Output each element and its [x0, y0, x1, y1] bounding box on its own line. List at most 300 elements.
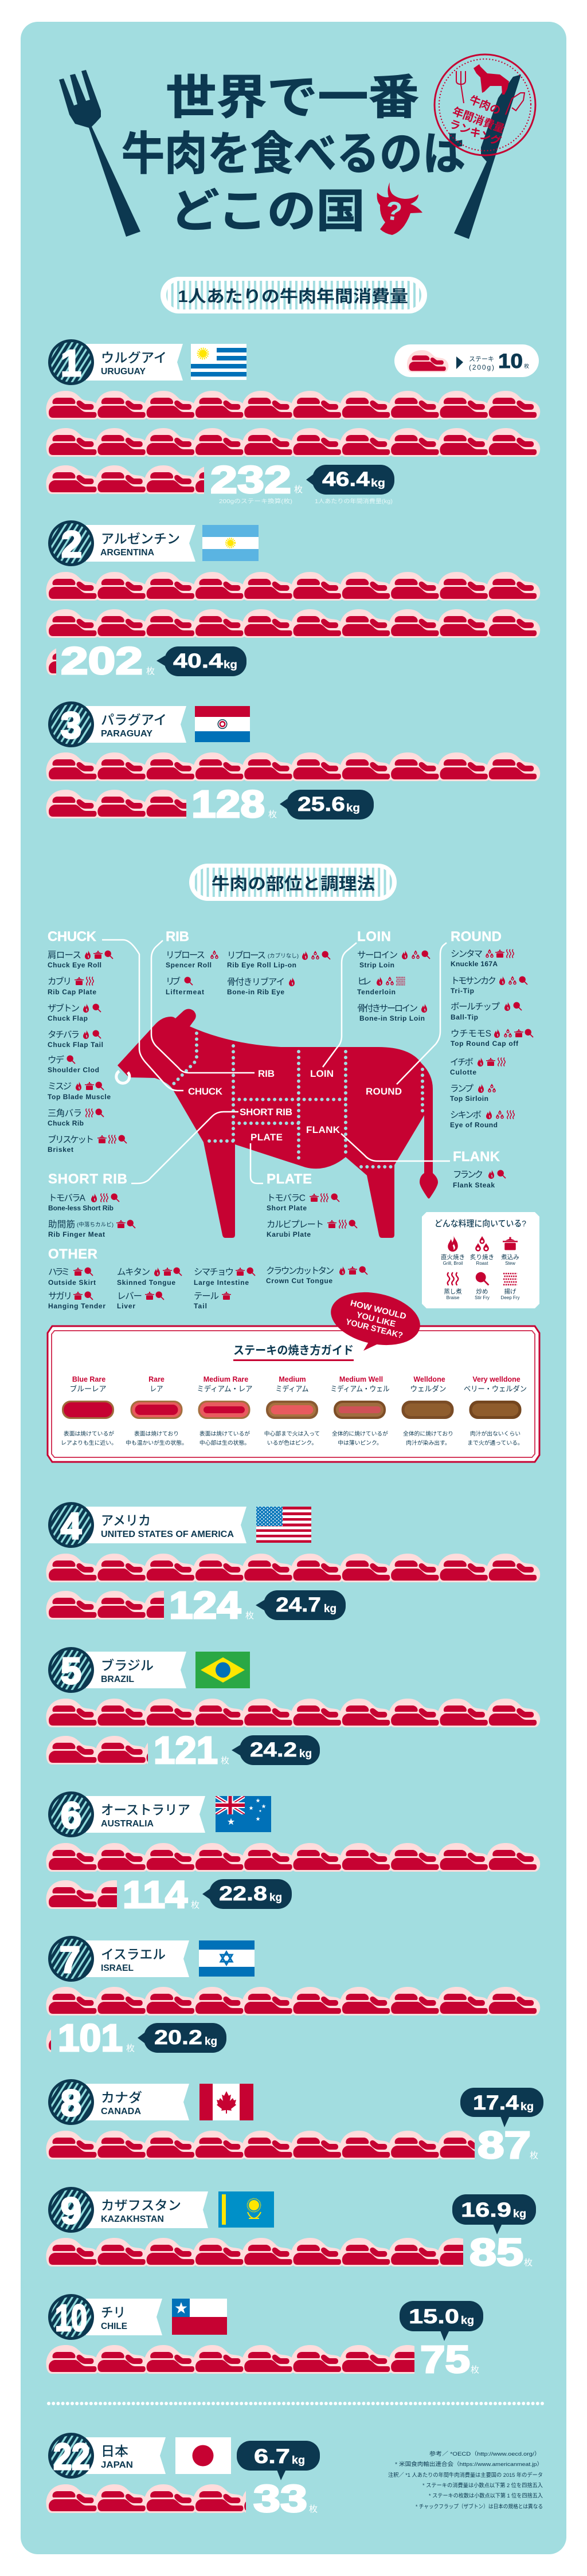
doneness: medium: Medium [279, 1375, 306, 1383]
item: ブリスケット [48, 1134, 127, 1154]
count: 128: 枚 [268, 810, 277, 820]
steak rows [46, 1554, 540, 1620]
rank badge: 4 [61, 1505, 81, 1547]
ribbon [86, 2299, 162, 2335]
item: トモバラA [48, 1193, 119, 1212]
item: シキンボ [450, 1109, 514, 1129]
item: トモサンカク: Tri-Tip [451, 987, 474, 995]
list: OTHER: OTHER [48, 1246, 97, 1262]
doneness: medium well: 中は薄いピンク。 [338, 1439, 382, 1446]
bubble: 16.9kg: kg [513, 2208, 526, 2220]
item: クラウンカットタン [266, 1265, 367, 1285]
section heading: 牛肉の部位と調理法: 牛肉の部位と調理法 [212, 875, 375, 893]
item: 助間筋(中落ちカルビ): 助間筋 [48, 1220, 75, 1230]
legend: steak 200g = 10 pieces: ステーキ [469, 356, 494, 363]
rank badge: 6 [61, 1794, 81, 1836]
doneness: well done: 肉汁が染み出す。 [406, 1439, 451, 1446]
bubble: 15.0kg [400, 2301, 483, 2341]
item: 骨付きサーロイン: Bone-in Strip Loin [359, 1014, 425, 1022]
ribbon [86, 2191, 208, 2228]
item: クラウンカットタン: クラウンカットタン [266, 1265, 334, 1276]
list: CHUCK [48, 929, 127, 1154]
item: ムキタン: ムキタン [117, 1267, 150, 1277]
count: 87: 87 [478, 2124, 531, 2167]
item: リブ: Liftermeat [166, 988, 204, 996]
item: リブロース(カブリなし): Rib Eye Roll Lip-on [227, 961, 296, 969]
item: ランプ [450, 1083, 496, 1103]
ribbon [86, 1796, 205, 1833]
rank badge [48, 339, 94, 385]
list: RIB [166, 929, 330, 996]
item: フランク: Flank Steak [453, 1181, 495, 1189]
item: テール: Tail [194, 1302, 207, 1310]
stamp: 牛肉の年間消費量ランキング: ランキング [448, 117, 503, 148]
doneness: medium rare: ミディアム・レア [197, 1385, 252, 1393]
legend: steak 200g = 10 pieces [394, 344, 539, 377]
bubble: 25.6kg [280, 790, 374, 820]
item: カルビプレート: Karubi Plate [267, 1230, 311, 1238]
item: クラウンカットタン: Crown Cut Tongue [266, 1277, 332, 1285]
count: 124: 枚 [245, 1611, 254, 1621]
count: 33: 枚 [309, 2504, 318, 2514]
count: 124: 124 [169, 1584, 241, 1627]
ribbon [86, 1507, 246, 1543]
icon: stew: 煮込み [501, 1254, 519, 1261]
count: 75: 75 [420, 2338, 470, 2381]
icon: stir fry: Stir Fry [475, 1295, 490, 1300]
bubble: 22.8kg: kg [269, 1892, 282, 1904]
item: トモバラC [267, 1193, 339, 1212]
rank 6: Australia [46, 1791, 540, 1916]
rank badge: 8 [61, 2082, 81, 2124]
count: 121: 枚 [221, 1756, 229, 1766]
item: ミスジ [48, 1081, 111, 1101]
list: SHORT RIB: SHORT RIB [48, 1171, 127, 1187]
references and notes: * チャックフラップ（ザブトン）は日本の規格とは異なる [416, 2503, 543, 2510]
item: 肩ロース: 肩ロース [48, 950, 81, 960]
ribbon: ISRAEL [101, 1963, 134, 1973]
ribbon: カザフスタン [101, 2198, 181, 2213]
item: イチボ [450, 1057, 505, 1076]
list: LOIN [357, 929, 430, 1022]
item: シキンボ: シキンボ [450, 1109, 482, 1120]
count: 202: 枚 [146, 666, 155, 676]
count: 114: 枚 [191, 1900, 199, 1910]
bubble: 24.2kg: kg [299, 1748, 312, 1760]
icon: braise: 蒸し煮 [444, 1288, 462, 1295]
item: シマチョウ [194, 1267, 255, 1287]
count: 121: 121 [154, 1729, 218, 1772]
references and notes: * 米国食肉輸出連合会（https://www.americanmeat.jp） [395, 2461, 543, 2468]
item: シンタマ: Knuckle 167A [451, 960, 498, 968]
doneness: medium [264, 1375, 320, 1446]
count: 85: 枚 [524, 2258, 533, 2268]
icon: braise: Braise [447, 1295, 460, 1300]
flag: Paraguay [195, 706, 250, 742]
bubble: 24.2kg: 24.2 [250, 1739, 297, 1761]
speech bubble: how would you like your steak: HOW WOULD [349, 1299, 407, 1322]
item: タチバラ: タチバラ [48, 1029, 80, 1040]
item: リブロース: リブロース [166, 949, 205, 960]
flag: Canada [199, 2084, 253, 2120]
ribbon: ARGENTINA [100, 548, 154, 558]
bubble: 20.2kg [138, 2023, 226, 2053]
item: 肩ロース: Chuck Eye Roll [48, 961, 101, 969]
item: サガリ: サガリ [48, 1291, 72, 1301]
item: ヒレ: Tenderloin [357, 988, 396, 996]
item: リブロース: Spencer Roll [166, 961, 212, 969]
bubble: 40.4kg: 40.4 [173, 650, 224, 672]
ribbon: ウルグアイ [101, 350, 167, 365]
ribbon: 日本 [101, 2444, 128, 2459]
icon: deep fry [501, 1273, 519, 1300]
ribbon [86, 344, 183, 381]
item: シンタマ [451, 949, 514, 968]
stamp: 牛肉の年間消費量ランキング: 年間消費量 [451, 104, 506, 136]
flag: Australia [216, 1796, 271, 1832]
cut labels on cow: CHUCK [188, 1086, 223, 1097]
ribbon [86, 525, 195, 562]
icon: roast [470, 1236, 494, 1266]
list: ROUND: ROUND [451, 929, 502, 944]
doneness: blue rare: 表面は焼けているが [64, 1430, 114, 1437]
bubble: 46.4kg [306, 465, 394, 505]
ribbon: AUSTRALIA [101, 1819, 154, 1829]
flag: Uruguay [191, 344, 246, 380]
item: リブロース [166, 949, 218, 969]
count: 114: 114 [123, 1873, 187, 1916]
item: タチバラ: Chuck Flap Tail [48, 1041, 103, 1049]
bubble: 15.0kg: 15.0 [409, 2306, 459, 2328]
steak rows [46, 1987, 540, 2052]
bubble: 24.7kg: kg [324, 1603, 336, 1615]
item: ミスジ: Top Blade Muscle [48, 1093, 111, 1101]
rank 5: Brazil [46, 1647, 540, 1772]
rank badge [48, 2079, 94, 2125]
count: 75: 枚 [471, 2365, 479, 2375]
leader lines [102, 940, 450, 1183]
doneness: blue rare: ブルーレア [70, 1385, 107, 1393]
doneness: well done [401, 1375, 454, 1446]
doneness: medium well: ミディアム・ウェル [330, 1385, 390, 1393]
item: ウデ: Shoulder Clod [48, 1066, 99, 1074]
panel: steak doneness guide [48, 1326, 539, 1462]
item: レバー: Liver [117, 1302, 135, 1310]
flag: Brazil [195, 1652, 250, 1688]
item: ザブトン: ザブトン [48, 1003, 80, 1013]
rank 8: Canada [46, 2079, 543, 2167]
ribbon: アルゼンチン [101, 531, 180, 546]
item: ランプ: ランプ [450, 1083, 473, 1093]
bubble: 17.4kg [460, 2088, 543, 2127]
references and notes: * ステーキの枚数は小数点以下第 1 位を四捨五入 [429, 2492, 543, 2499]
item: 骨付きリブアイ: 骨付きリブアイ [227, 977, 285, 987]
item: リブロース(カブリなし) [227, 950, 330, 969]
list: RIB: RIB [166, 929, 189, 944]
steak row [46, 2131, 475, 2159]
item: カルビプレート: カルビプレート [267, 1220, 324, 1230]
ribbon: チリ [101, 2305, 126, 2320]
list: CHUCK: CHUCK [48, 929, 97, 944]
doneness: medium well: Medium Well [339, 1375, 383, 1383]
cut labels on cow: LOIN [310, 1068, 334, 1079]
item: テール: テール [194, 1292, 219, 1301]
item: ハラミ [48, 1268, 96, 1287]
doneness: blue rare: Blue Rare [72, 1375, 105, 1383]
item: 助間筋(中落ちカルビ): (中落ちカルビ) [77, 1221, 114, 1228]
item: ザブトン: Chuck Flap [48, 1014, 88, 1022]
item: ウデ: ウデ [48, 1054, 64, 1065]
ribbon: BRAZIL [101, 1675, 134, 1684]
icon: deep fry: 揚げ [504, 1288, 516, 1295]
rank 22: Japan [46, 2433, 540, 2520]
item: シマチョウ: シマチョウ [194, 1267, 234, 1277]
item: ウチモモS: Top Round Cap off [451, 1040, 519, 1048]
icon: direct grill [441, 1236, 465, 1266]
flag: Argentina [202, 525, 259, 561]
cut labels on cow: SHORT RIB [240, 1107, 292, 1118]
rank badge: 5 [61, 1650, 81, 1692]
legend: steak 200g = 10 pieces: 枚 [524, 363, 529, 369]
item: タチバラ [48, 1029, 103, 1049]
doneness: very well done: まで火が通っている。 [467, 1439, 523, 1446]
ribbon: UNITED STATES OF AMERICA [101, 1530, 234, 1539]
ribbon: イスラエル [101, 1947, 166, 1962]
icon: nose ring [116, 1071, 130, 1083]
item: ブリスケット: ブリスケット [48, 1134, 94, 1145]
item: 三角バラ: 三角バラ [48, 1108, 82, 1119]
ribbon: カナダ [101, 2090, 142, 2105]
count: 202 [61, 640, 155, 683]
bubble: 6.7kg [237, 2441, 320, 2480]
item: カブリ [48, 975, 96, 996]
item: サガリ [48, 1291, 105, 1310]
steak row [46, 2238, 463, 2267]
title: どこの国 [170, 186, 365, 237]
doneness: rare: レア [150, 1385, 163, 1393]
rank 9: Kazakhstan [46, 2187, 540, 2274]
flag: Israel [199, 1940, 255, 1977]
icon: fork [59, 70, 140, 237]
count: 33: 33 [253, 2477, 307, 2520]
bubble: 46.4kg: 46.4 [322, 468, 370, 491]
item: トモバラC: Short Plate [267, 1204, 307, 1212]
icon: roast: Roast [476, 1261, 488, 1266]
rank 2: Argentina [46, 520, 540, 683]
ribbon: KAZAKHSTAN [101, 2214, 164, 2224]
item: リブロース(カブリなし): リブロース [227, 950, 266, 960]
rank badge: 3 [61, 704, 81, 746]
item: フランク: フランク [453, 1169, 483, 1179]
bubble: 40.4kg: kg [224, 659, 237, 671]
ribbon [86, 706, 186, 743]
item: トモバラA: Bone-less Short Rib [48, 1204, 114, 1212]
doneness: medium rare [197, 1375, 252, 1446]
item: ウチモモS [451, 1028, 533, 1048]
doneness: rare: 中も温かいが生の状態。 [126, 1439, 187, 1446]
list: PLATE [267, 1171, 357, 1238]
ribbon [86, 2437, 166, 2474]
item: シンタマ: シンタマ [451, 949, 483, 959]
doneness: rare: Rare [148, 1375, 165, 1383]
rank badge [48, 520, 94, 566]
item: ボールチップ: Ball-Tip [451, 1013, 478, 1021]
cut labels on cow: PLATE [251, 1132, 283, 1143]
legend: steak 200g = 10 pieces: (200g) [469, 363, 494, 371]
doneness: rare [126, 1375, 187, 1446]
item: ムキタン: Skinned Tongue [117, 1279, 175, 1287]
flag: Japan [175, 2437, 231, 2474]
item: ミスジ: ミスジ [48, 1082, 72, 1091]
bubble: 24.7kg [256, 1590, 346, 1620]
bubble: 20.2kg: 20.2 [154, 2026, 202, 2049]
bubble: 16.9kg [452, 2194, 536, 2234]
rank badge: 10 [55, 2297, 87, 2339]
icon: roast: 炙り焼き [470, 1254, 494, 1261]
ribbon: CHILE [101, 2322, 127, 2331]
icon: cow head question mark [377, 182, 422, 235]
bubble: 15.0kg: kg [461, 2315, 474, 2327]
doneness: well done: 全体的に焼けており [403, 1430, 453, 1437]
item: 骨付きサーロイン: 骨付きサーロイン [357, 1003, 418, 1013]
item: イチボ: イチボ [450, 1057, 473, 1067]
icon: stir fry [475, 1272, 490, 1300]
icon: stir fry: 炒め [476, 1288, 488, 1295]
ribbon: PARAGUAY [101, 729, 152, 739]
rank badge [48, 1791, 94, 1837]
item: 肩ロース [48, 950, 113, 969]
bubble: 46.4kg: 1人あたりの年間消費量(kg) [315, 497, 393, 505]
title: 牛肉を食べるのは [122, 128, 465, 179]
bubble: 24.2kg [232, 1735, 320, 1765]
item: ムキタン [117, 1267, 182, 1287]
item: リブ [166, 975, 204, 996]
item: フランク [453, 1169, 506, 1189]
rank 7: Israel [46, 1936, 540, 2060]
rank badge [48, 701, 94, 747]
bubble: 17.4kg: kg [521, 2101, 534, 2113]
item: 助間筋(中落ちカルビ) [48, 1220, 135, 1238]
item: トモサンカク [451, 975, 527, 995]
item: 骨付きサーロイン [357, 1003, 427, 1022]
speech bubble: how would you like your steak: YOU LIKE [355, 1311, 397, 1329]
steak rows [46, 752, 540, 818]
rank badge: 22 [53, 2436, 90, 2477]
list: FLANK: FLANK [453, 1149, 500, 1165]
doneness: very well done: 肉汁が出ないくらい [470, 1430, 521, 1437]
panel: cooking method legend [422, 1212, 539, 1308]
rank badge: 2 [61, 523, 82, 565]
stamp: 牛肉の年間消費量ランキング [435, 54, 535, 155]
ribbon [86, 2084, 189, 2120]
doneness: very well done: ベリー・ウェルダン [464, 1385, 527, 1393]
item: 三角バラ: Chuck Rib [48, 1119, 84, 1127]
count: 85 [469, 2231, 533, 2274]
count: 87: 枚 [530, 2151, 538, 2161]
icon: knife [454, 75, 521, 239]
bubble: 6.7kg: kg [292, 2455, 305, 2467]
doneness: medium: いるが色はピンク。 [267, 1439, 317, 1446]
title: 世界で一番 [166, 72, 419, 124]
ribbon: ブラジル [101, 1658, 154, 1673]
speech bubble: how would you like your steak [326, 1285, 425, 1352]
ribbon: URUGUAY [101, 367, 146, 377]
item: リブ: リブ [166, 975, 181, 987]
bubble: 22.8kg [202, 1879, 292, 1909]
rank badge [48, 1936, 94, 1982]
ribbon [86, 1652, 186, 1688]
icon: stew [501, 1237, 519, 1266]
references and notes: 注釈／ *1 人あたりの年間牛肉消費量は主要国の 2015 年のデータ [388, 2472, 543, 2479]
steak rows [46, 1699, 540, 1765]
rank badge [48, 1502, 94, 1548]
rank 3: Paraguay [46, 701, 540, 826]
doneness: medium rare: 中心部は生の状態。 [199, 1439, 250, 1446]
ribbon: CANADA [101, 2107, 141, 2116]
item: サガリ: Hanging Tender [48, 1302, 105, 1310]
item: ブリスケット: Brisket [48, 1146, 73, 1154]
doneness: well done: Welldone [413, 1375, 445, 1383]
count: 101: 枚 [126, 2044, 135, 2053]
rank badge [48, 2187, 94, 2233]
bubble: 16.9kg: 16.9 [461, 2199, 511, 2221]
doneness: medium: 中心部まで火は入って [264, 1430, 320, 1437]
item: 骨付きリブアイ [227, 977, 295, 996]
doneness: very well done: Very welldone [472, 1375, 521, 1383]
count: 33 [253, 2477, 318, 2520]
item: ウデ [48, 1054, 99, 1074]
ribbon: アメリカ [101, 1513, 151, 1528]
item: ウチモモS: ウチモモS [451, 1028, 491, 1038]
item: ボールチップ: ボールチップ [451, 1002, 500, 1012]
item: シマチョウ: Large Intestine [194, 1279, 249, 1287]
doneness: medium well [330, 1375, 390, 1446]
doneness: rare: 表面は焼けており [134, 1430, 179, 1437]
item: シキンボ: Eye of Round [450, 1121, 498, 1129]
doneness: medium well: 全体的に焼けているが [332, 1430, 388, 1437]
item: トモバラC: トモバラC [267, 1193, 306, 1203]
list: LOIN: LOIN [357, 929, 391, 944]
icon: direct grill: 直火焼き [441, 1253, 465, 1261]
item: 三角バラ [48, 1108, 104, 1127]
panel: cooking method legend: どんな料理に向いている? [435, 1219, 526, 1229]
icon: stew: Stew [505, 1261, 515, 1266]
bubble: 46.4kg: kg [371, 477, 385, 489]
cut labels on cow: ROUND [366, 1086, 402, 1097]
count: 232: 232 [210, 458, 291, 501]
bubble: 17.4kg: 17.4 [473, 2092, 519, 2114]
item: サーロイン [357, 950, 430, 969]
bubble: 40.4kg [156, 646, 246, 676]
item: サーロイン: Strip Loin [359, 961, 394, 969]
list: ROUND [450, 929, 533, 1129]
doneness: blue rare: レアよりも生に近い。 [61, 1439, 117, 1446]
item: サーロイン: サーロイン [357, 950, 398, 960]
icon: deep fry: Deep Fry [501, 1295, 519, 1300]
bubble: 25.6kg: kg [346, 802, 360, 814]
list: OTHER [48, 1246, 367, 1310]
bubble: 24.7kg: 24.7 [276, 1594, 321, 1616]
count: 232: 枚 [294, 485, 303, 495]
item: レバー: レバー [117, 1292, 142, 1301]
item: ランプ: Top Sirloin [450, 1095, 488, 1103]
guide title: ステーキの焼き方ガイド [233, 1344, 354, 1357]
section heading: 1人あたりの牛肉年間消費量: 1人あたりの牛肉年間消費量 [178, 287, 408, 306]
bubble: 22.8kg: 22.8 [219, 1883, 267, 1905]
section heading: 牛肉の部位と調理法 [189, 864, 397, 901]
ribbon: パラグアイ [101, 712, 167, 727]
flag: Kazakhstan [218, 2191, 274, 2228]
